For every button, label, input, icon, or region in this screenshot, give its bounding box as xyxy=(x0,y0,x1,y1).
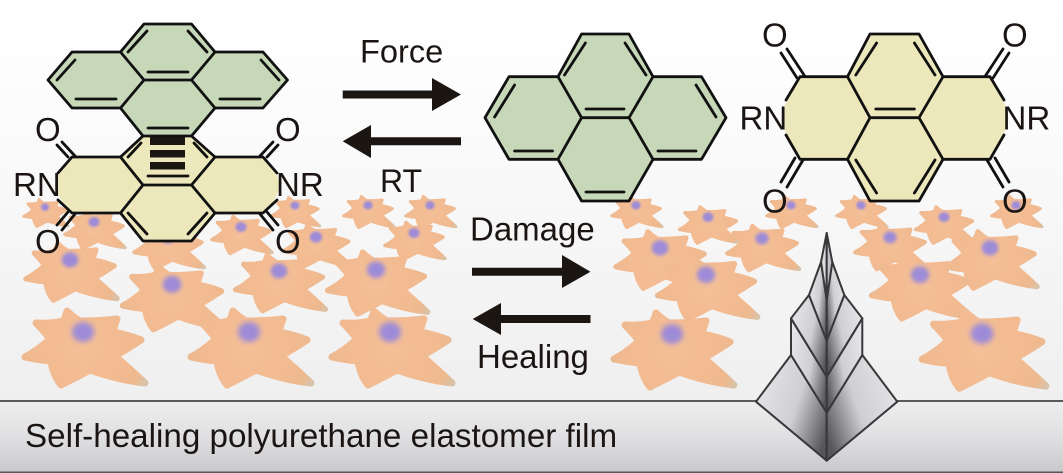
atom labels: RN xyxy=(13,166,61,203)
label: Damage: Damage xyxy=(470,211,595,248)
label: Force: Force xyxy=(360,33,443,70)
stacking bars xyxy=(150,137,185,170)
atom labels: NR xyxy=(276,166,324,203)
arrow: RT left xyxy=(343,125,461,158)
molecule: pyrene (right) xyxy=(485,34,726,201)
arrow: Force right xyxy=(343,78,461,111)
NDI bonds xyxy=(781,34,1009,201)
molecule: NDI (right) xyxy=(740,16,1050,220)
elastomer film band xyxy=(0,400,1063,473)
crack in film xyxy=(756,233,897,461)
atom labels: O xyxy=(762,16,788,54)
molecule: NDI stacked (left) xyxy=(13,24,324,260)
cells: right group xyxy=(612,196,1046,388)
arrow: Damage right xyxy=(472,255,590,288)
label: RT: RT xyxy=(380,163,422,199)
NDI yellow fill xyxy=(782,34,1008,201)
atom labels: O xyxy=(35,223,61,260)
atom labels: NR xyxy=(1002,100,1050,136)
atom labels: O xyxy=(275,111,301,148)
atom labels xyxy=(13,111,324,260)
pyrene stacked on NDI xyxy=(48,24,288,136)
label: film caption: Self-healing polyurethane elastomer film xyxy=(25,418,617,455)
atom labels: RN xyxy=(740,100,787,136)
label: Healing: Healing xyxy=(477,338,589,375)
atom labels: O xyxy=(1002,182,1028,220)
atom labels: O xyxy=(762,182,788,220)
NDI yellow fill xyxy=(55,136,280,241)
cells: left group xyxy=(24,196,456,385)
NDI bonds xyxy=(57,136,278,241)
atom labels: O xyxy=(275,223,301,260)
atom labels xyxy=(740,16,1050,220)
arrow: Healing left xyxy=(473,303,590,335)
atom labels: O xyxy=(35,111,61,148)
atom labels: O xyxy=(1002,16,1028,54)
